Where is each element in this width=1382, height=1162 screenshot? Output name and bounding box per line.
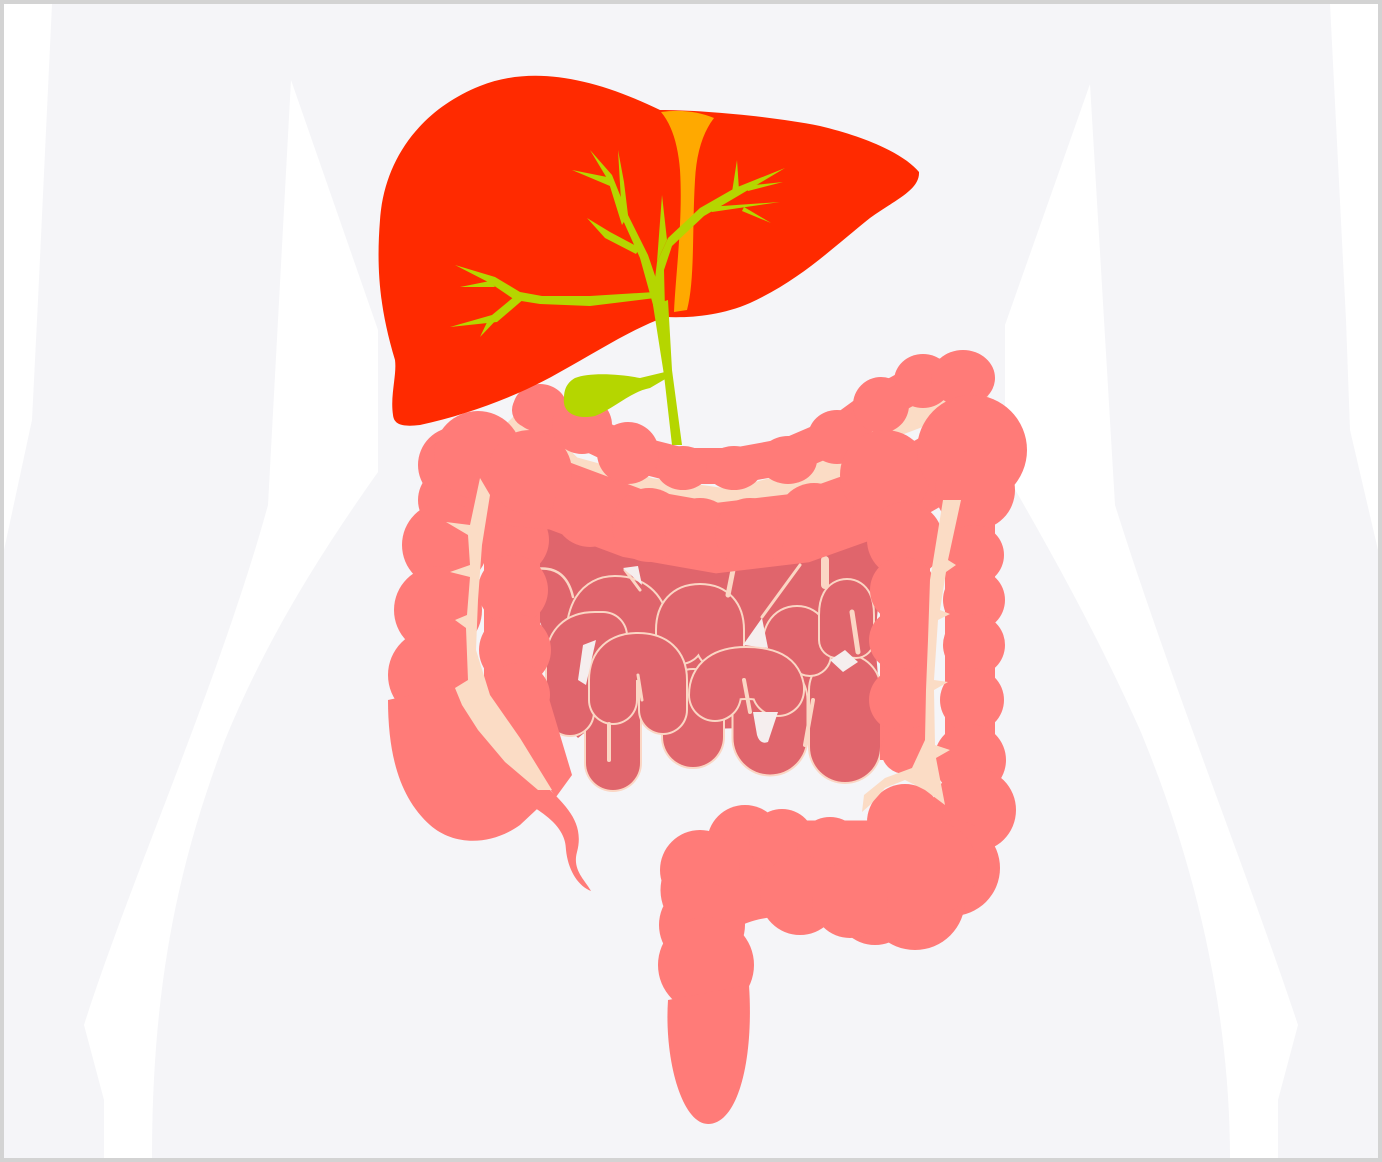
right mesentery band (862, 500, 961, 812)
inner ascending strip (478, 500, 572, 797)
gallbladder (564, 372, 667, 417)
right hepatic branches (653, 160, 785, 310)
intestine lower U loops (613, 690, 845, 763)
liver ligament (661, 111, 714, 312)
left mesentery band (446, 478, 552, 790)
common bile duct (653, 300, 682, 445)
inner descending strip (867, 502, 943, 860)
descending colon (835, 450, 1016, 950)
intestine upper arcs (530, 569, 856, 712)
colon: large intestine (388, 350, 1027, 1124)
mesentery behind transverse colon (515, 394, 988, 503)
liver body (379, 76, 919, 426)
left hepatic branches (450, 150, 665, 337)
sigmoid colon (658, 805, 930, 1013)
outer ascending colon and cecum (388, 427, 591, 891)
intestine gaps (578, 566, 858, 743)
bile ducts (450, 150, 785, 445)
intestine cream slits (609, 560, 858, 760)
small intestine (530, 525, 885, 763)
appendix (528, 785, 591, 891)
mesentery bands (446, 478, 961, 812)
rectum (667, 985, 750, 1124)
intestine base mass (530, 525, 885, 738)
transverse colon upper strip (513, 350, 995, 490)
transverse colon lower strip (434, 395, 1027, 568)
liver (379, 76, 919, 426)
